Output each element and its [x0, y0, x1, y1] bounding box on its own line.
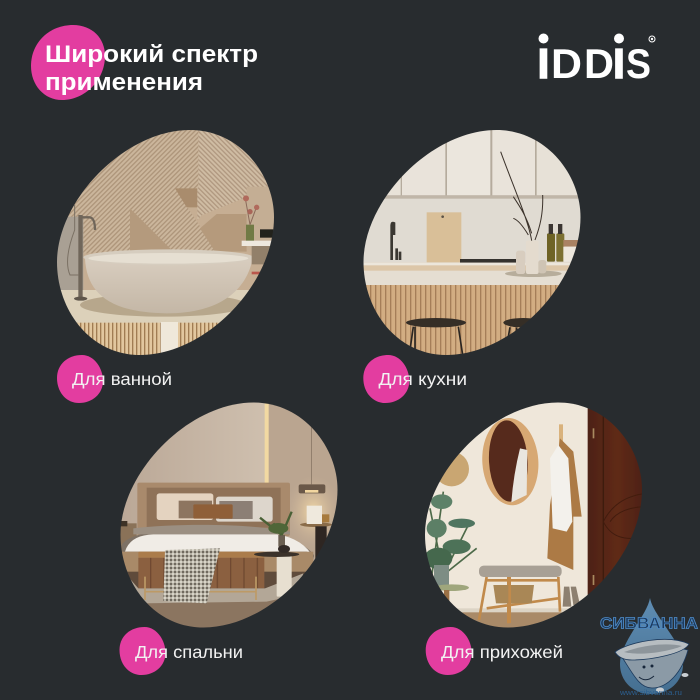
watermark url: www.sibvanna.ru — [619, 690, 682, 697]
label: kitchen — [363, 355, 467, 403]
label: bedroom — [120, 627, 243, 675]
label accent blob — [57, 355, 103, 403]
watermark name: СИБВАННА — [600, 616, 698, 632]
icon: water drop with bathtub — [615, 598, 689, 694]
panel: hallway — [425, 402, 642, 675]
title: Широкий спектр — [45, 41, 258, 68]
logo: IDDIS — [538, 34, 655, 87]
logo: IDDIS: I — [538, 40, 549, 87]
photo: bedroom — [120, 402, 338, 628]
label text: Для ванной — [72, 369, 172, 389]
label accent blob — [120, 627, 166, 675]
title: применения — [45, 69, 203, 96]
photo: bathroom — [57, 130, 274, 355]
title block — [31, 25, 258, 100]
panel: bedroom — [120, 402, 338, 675]
logo: IDDIS: S — [626, 40, 651, 87]
label text: Для прихожей — [441, 642, 563, 662]
title accent blob — [31, 25, 105, 100]
label text: Для кухни — [378, 369, 467, 389]
logo: IDDIS: D — [584, 40, 614, 87]
logo: IDDIS: I — [613, 40, 625, 87]
photo: hallway — [425, 402, 642, 628]
photo: kitchen — [364, 130, 580, 355]
label text: Для спальни — [135, 642, 243, 662]
watermark: Сибванна — [600, 598, 698, 697]
logo: IDDIS: D — [551, 40, 582, 87]
panel: bathroom — [57, 130, 274, 403]
panel: kitchen — [363, 130, 580, 403]
label: bathroom — [57, 355, 172, 403]
title — [45, 41, 258, 96]
label: hallway — [426, 627, 563, 675]
label accent blob — [426, 627, 472, 675]
label accent blob — [363, 355, 409, 403]
